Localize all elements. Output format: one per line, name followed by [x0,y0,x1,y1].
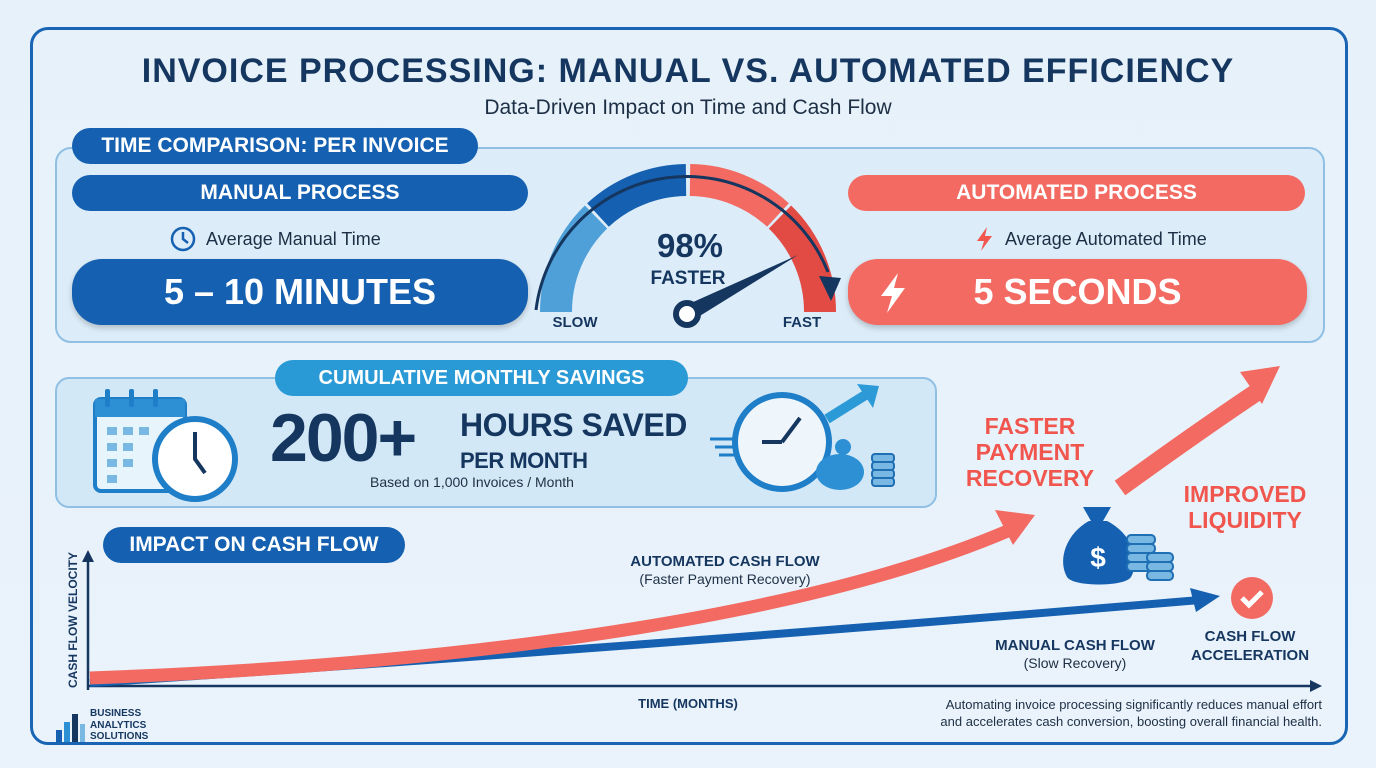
label: cash flow acceleration: CASH FLOW [1205,628,1295,645]
savings label: PER MONTH [460,448,588,473]
automated process label: AUTOMATED PROCESS [956,181,1197,204]
footer note: and accelerates cash conversion, boosting overall financial health. [940,714,1322,729]
gauge: SLOW [552,314,598,331]
label: faster payment recovery: FASTER [985,413,1075,439]
label: cash flow acceleration [1191,628,1309,664]
label: manual cash flow: (Slow Recovery) [1024,655,1126,671]
icon: clock piggy bank [710,384,895,492]
heading: time comparison [72,128,478,164]
manual value [72,259,528,325]
logo: SOLUTIONS [90,731,148,742]
label: improved liquidity: LIQUIDITY [1188,507,1302,533]
panel: monthly savings [55,377,937,508]
automated value: 5 SECONDS [973,271,1182,312]
icon: calendar clock [93,389,238,502]
gauge: FAST [783,314,821,331]
manual value: 5 – 10 MINUTES [164,271,436,312]
logo: BUSINESS [90,708,141,719]
label: automated cash flow: AUTOMATED CASH FLOW [630,553,820,570]
manual process label: MANUAL PROCESS [200,181,400,204]
logo [56,708,148,742]
savings label: HOURS SAVED [460,407,687,443]
icon: money bag: $ [1090,542,1106,573]
heading: time comparison: TIME COMPARISON: PER INVOICE [101,134,449,157]
savings figure: 200+ [270,400,415,476]
panel: time comparison [55,147,1325,343]
chart: cash flow: CASH FLOW VELOCITY [66,552,80,688]
gauge [534,164,841,331]
heading: cash flow [103,527,405,563]
label: improved liquidity: IMPROVED [1184,481,1306,507]
label: improved liquidity [1184,481,1306,533]
heading: monthly savings [275,360,688,396]
footer note [940,697,1322,729]
automated value [848,259,1307,325]
footer note: Automating invoice processing significantly reduces manual effort [946,697,1322,712]
icon: money bag [1063,507,1174,584]
icon: check [1231,577,1273,619]
logo: ANALYTICS [90,720,146,730]
gauge: FASTER [651,268,726,289]
savings note: Based on 1,000 Invoices / Month [370,474,574,490]
label: faster payment recovery [966,413,1094,491]
manual process label [72,175,528,211]
label: faster payment recovery: PAYMENT [976,439,1084,465]
label: automated cash flow: (Faster Payment Recovery) [639,571,811,587]
label: automated cash flow [630,553,820,587]
label: manual cash flow: MANUAL CASH FLOW [995,637,1155,654]
label: cash flow acceleration: ACCELERATION [1191,647,1309,664]
label: manual cash flow [995,637,1155,671]
manual time text [170,226,381,252]
savings label [460,407,687,473]
gauge: 98% [657,227,723,264]
heading: monthly savings: CUMULATIVE MONTHLY SAVINGS [319,366,644,388]
label: faster payment recovery: RECOVERY [966,465,1094,491]
chart: cash flow: TIME (MONTHS) [638,696,738,711]
manual time text: Average Manual Time [206,228,381,248]
automated time text: Average Automated Time [1005,228,1207,248]
automated process label [848,175,1305,211]
subtitle: Data-Driven Impact on Time and Cash Flow [484,96,892,119]
title: INVOICE PROCESSING: MANUAL VS. AUTOMATED EFFICIENCY [142,52,1234,90]
heading: cash flow: IMPACT ON CASH FLOW [129,533,379,556]
